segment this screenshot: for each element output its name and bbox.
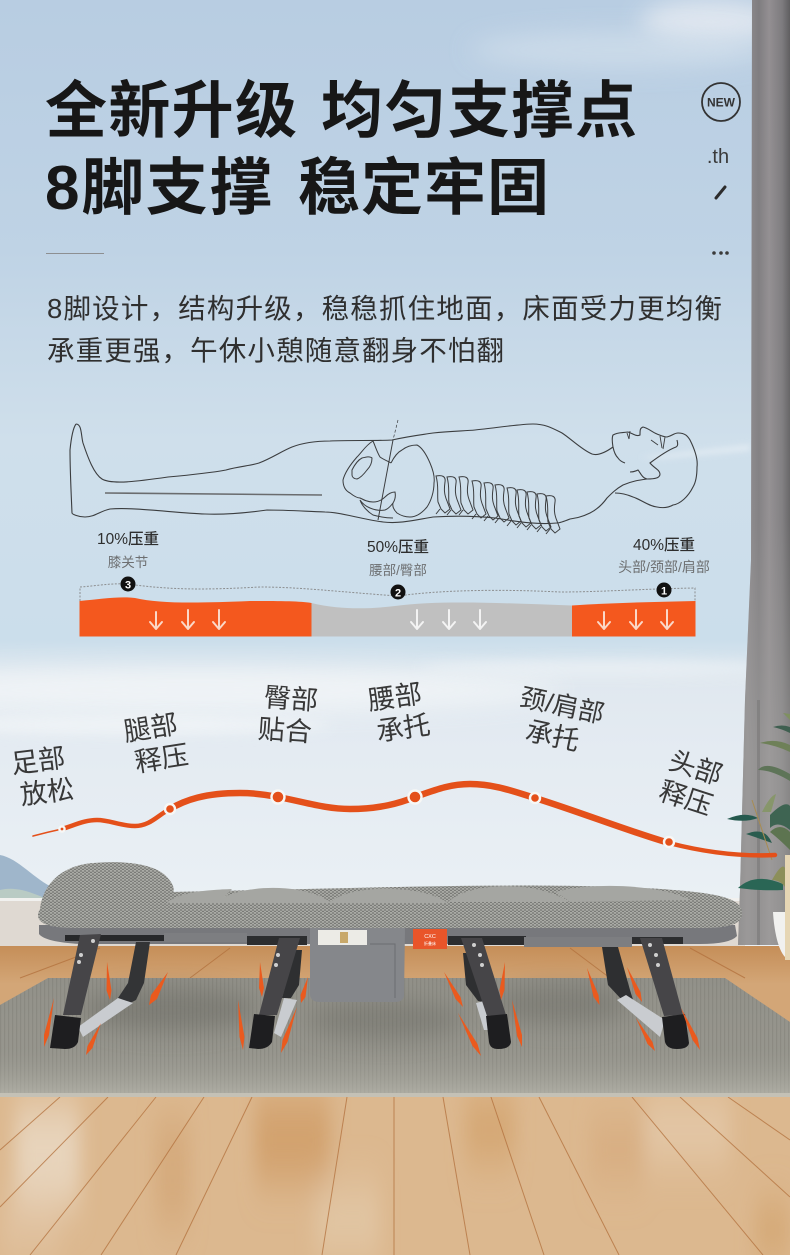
orange segment left bbox=[80, 597, 312, 636]
label: neck: 颈/肩部 bbox=[517, 682, 607, 729]
10% label: 10%压重 bbox=[97, 530, 159, 548]
40% label: 40%压重 bbox=[633, 536, 695, 554]
label: foot bbox=[10, 742, 76, 811]
arrows bbox=[150, 610, 673, 629]
curve nodes bbox=[59, 790, 674, 847]
text: .th: .th bbox=[707, 146, 729, 168]
label: head bbox=[655, 745, 726, 821]
wood floor bbox=[0, 946, 790, 1255]
icon: slash bbox=[716, 187, 725, 198]
top tufted cushions bbox=[166, 886, 690, 903]
label: head: 释压 bbox=[655, 776, 716, 821]
title line 1: 全新升级 bbox=[45, 77, 297, 146]
marker 2 bbox=[390, 584, 406, 600]
label: hip: 臀部 bbox=[263, 682, 319, 716]
50% sublabel: 腰部/臀部 bbox=[369, 563, 427, 578]
label: waist: 腰部 bbox=[366, 679, 424, 716]
label: waist bbox=[366, 678, 432, 748]
label: leg bbox=[122, 708, 191, 779]
brand tag bbox=[413, 929, 447, 949]
label: hip: 贴合 bbox=[257, 714, 313, 748]
leg 1 bbox=[50, 934, 150, 1049]
10% sublabel: 膝关节 bbox=[108, 555, 148, 570]
marker 3: 3 bbox=[125, 580, 131, 592]
marker 1: 1 bbox=[661, 586, 667, 598]
pelvis and spine bbox=[343, 420, 560, 534]
label: neck bbox=[511, 682, 607, 760]
40% sublabel: 头部/颈部/肩部 bbox=[618, 559, 710, 575]
folding bed bbox=[38, 862, 742, 1056]
label: waist: 承托 bbox=[375, 710, 432, 747]
subtitle text block bbox=[46, 253, 722, 366]
leg 2 bbox=[249, 938, 302, 1049]
curved body line labels bbox=[10, 678, 726, 821]
leg 3 bbox=[461, 938, 511, 1049]
subtitle line 1: 8脚设计，结构升级，稳稳抓住地面，床面受力更均衡 bbox=[47, 293, 722, 324]
label: leg: 释压 bbox=[133, 740, 191, 778]
marker 2: 2 bbox=[395, 588, 401, 600]
callout: 50% bbox=[367, 538, 429, 578]
pouch bbox=[310, 928, 405, 1002]
brand tag: CXC bbox=[424, 934, 436, 940]
pillow bbox=[40, 862, 174, 921]
callout: 40% bbox=[618, 536, 710, 575]
grey segment bbox=[312, 602, 572, 636]
icon: dots bbox=[712, 251, 729, 255]
brand tag: 折叠床 bbox=[424, 940, 436, 946]
dotted profile line bbox=[80, 584, 695, 601]
force arrows bbox=[44, 962, 700, 1056]
leg bar line bbox=[105, 493, 322, 495]
label: neck: 承托 bbox=[523, 716, 582, 756]
label: leg: 腿部 bbox=[122, 709, 180, 747]
50% label: 50%压重 bbox=[367, 538, 429, 556]
orange segment right bbox=[572, 601, 696, 636]
pressure bar bbox=[80, 597, 696, 636]
title line 1 part 2: 均匀支撑点 bbox=[321, 77, 637, 146]
subtitle line 2: 承重更强，午休小憩随意翻身不怕翻 bbox=[47, 335, 504, 366]
badge: NEW: NEW bbox=[707, 96, 736, 110]
marker 1 bbox=[656, 582, 672, 598]
title line 2: 8脚支撑 bbox=[45, 154, 272, 223]
plant and pot bbox=[727, 713, 790, 960]
decorative badge column bbox=[702, 83, 740, 255]
badge: NEW bbox=[702, 83, 740, 121]
label: foot: 足部 bbox=[10, 743, 67, 779]
leg 4 bbox=[602, 938, 689, 1049]
label: head: 头部 bbox=[665, 745, 726, 791]
rug bbox=[0, 978, 790, 1097]
orange spine curve bbox=[33, 784, 775, 855]
body outline bbox=[70, 424, 697, 524]
body pressure diagram bbox=[70, 420, 710, 636]
mattress base bbox=[39, 925, 737, 944]
callout: 10% bbox=[97, 530, 159, 570]
mattress bbox=[38, 886, 742, 928]
frame rail bbox=[65, 933, 683, 947]
curtain bbox=[738, 0, 790, 945]
marker 3 bbox=[120, 576, 136, 592]
label: foot: 放松 bbox=[18, 774, 76, 810]
distant mountain and window sill bbox=[0, 855, 745, 947]
title line 2 part 2: 稳定牢固 bbox=[298, 154, 549, 223]
title bbox=[45, 77, 637, 223]
label: hip bbox=[257, 682, 319, 748]
